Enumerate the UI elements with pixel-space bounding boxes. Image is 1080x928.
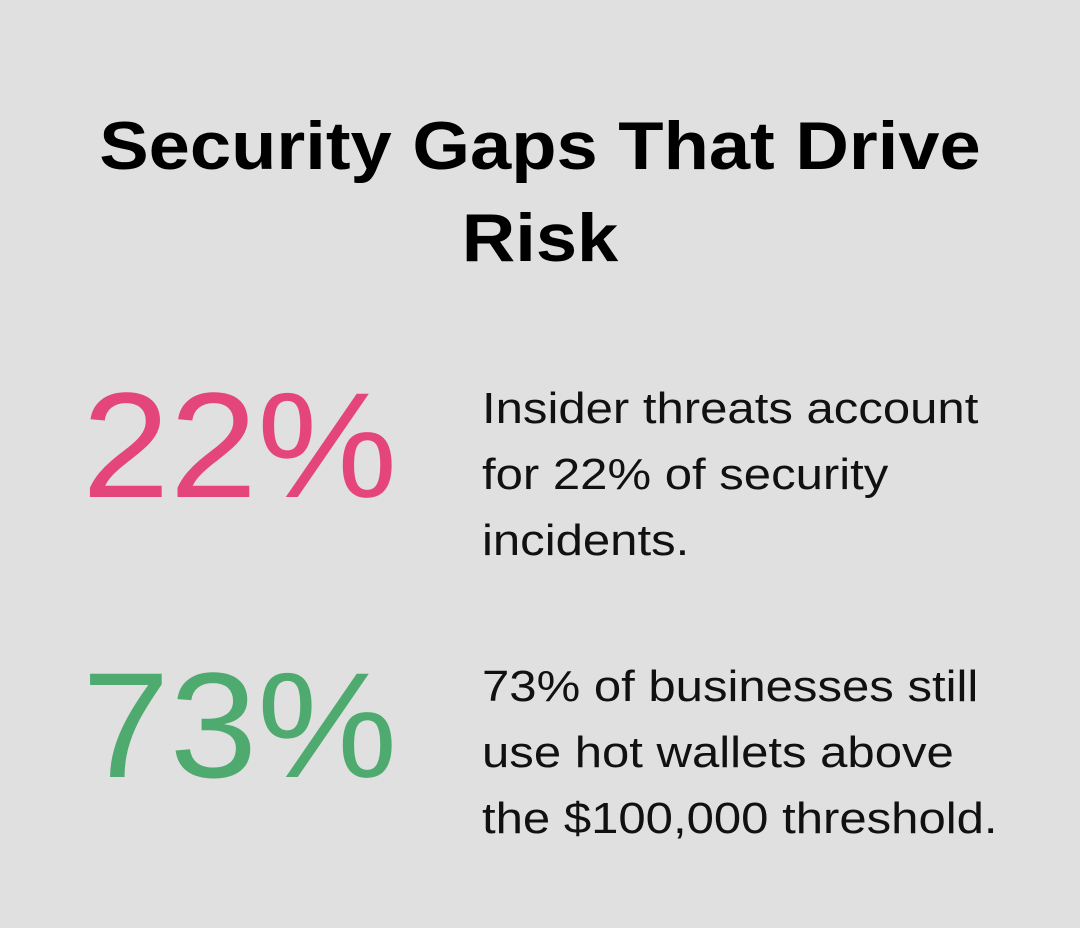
text: insider threats xyxy=(482,384,978,565)
text: hot wallets: the $100,000 threshold. xyxy=(482,794,998,843)
text: hot wallets: 73% of businesses still xyxy=(482,662,978,711)
stat: 73%: 73% xyxy=(82,641,397,809)
text: insider threats: Insider threats account xyxy=(482,384,978,433)
title: Security Gaps That Drive xyxy=(99,108,981,184)
title xyxy=(99,108,981,276)
text: hot wallets: use hot wallets above xyxy=(482,728,954,777)
text: insider threats: incidents. xyxy=(482,516,689,565)
stat: 22%: 22% xyxy=(82,361,397,529)
title: Risk xyxy=(462,200,618,276)
text: hot wallets xyxy=(482,662,998,843)
text: insider threats: for 22% of security xyxy=(482,450,888,499)
